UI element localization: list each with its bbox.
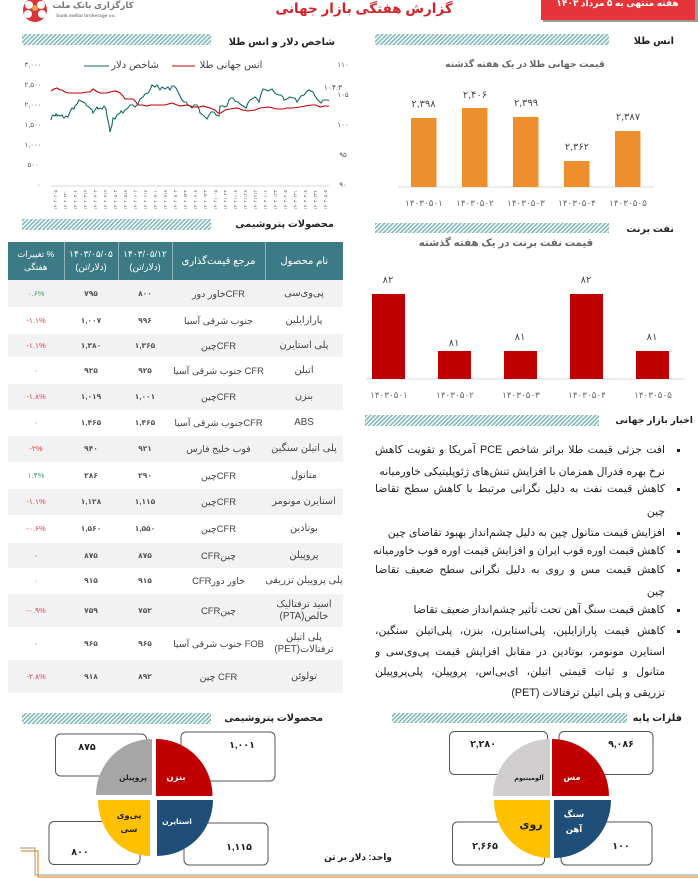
date labels: ۱۴۰۲۱۰۰۵ <box>213 189 218 210</box>
slice: iron ore: سنگ <box>564 809 584 819</box>
left axis: ۵۰۰ <box>27 162 39 169</box>
table: petrochemical products prices: CFRخاور دور <box>192 288 245 298</box>
table: petrochemical products prices: ۹۲۵ <box>138 366 152 374</box>
table: petrochemical products prices: ۲۹۰ <box>138 470 152 480</box>
slice: copper <box>552 739 609 796</box>
bar chart: gold price: ۱۴۰۳۰۵۰۳ <box>507 198 545 208</box>
news list: کاهش قیمت پارازایلین، پلی‌استایرن، بنزن، پلی‌اتیلن سنگین، <box>375 625 665 637</box>
date labels: ۱۴۰۲۰۴۰۳ <box>93 189 98 210</box>
slice: iron ore <box>554 800 611 858</box>
bar chart: brent price <box>366 236 685 400</box>
table: petrochemical products prices: ۹۶۵ <box>138 638 152 648</box>
value box: copper <box>559 732 653 774</box>
slice: aluminium <box>493 739 550 796</box>
bar chart: gold price: ۲,۳۸۷ <box>616 112 641 123</box>
date labels: ۱۴۰۳۰۵۰۵ <box>323 189 328 210</box>
slice: propylene: پروپیلن <box>119 773 147 782</box>
left axis: ۱,۰۰۰ <box>25 142 41 149</box>
heading: gold ounce <box>375 34 674 47</box>
bar chart: brent price: ۱۴۰۳۰۵۰۲ <box>436 390 474 400</box>
table: petrochemical products prices: تولوئن <box>291 670 317 682</box>
table: petrochemical products prices: FOB جنوب شرقی آسیا <box>173 638 264 648</box>
bar chart: gold price: ۲,۳۹۹ <box>514 98 538 109</box>
logo: bank mellat brokerage <box>23 0 135 22</box>
left axis: ۲,۵۰۰ <box>25 82 41 89</box>
table: petrochemical products prices: ۱,۱۱۵ <box>135 497 155 506</box>
table: petrochemical products prices: استایرن مونومر <box>272 496 336 507</box>
heading: petrochemicals prices <box>22 713 323 724</box>
heading: world market news: اخبار بازار جهانی <box>615 415 693 426</box>
table: petrochemical products prices: ۱۴۰۳/۰۵/۰۵ <box>69 249 113 259</box>
value box: propylene: ۸۷۵ <box>78 742 96 753</box>
table: petrochemical products prices: ۹۱۵ <box>138 576 152 585</box>
heading: base metals <box>392 713 682 724</box>
value box: aluminium <box>450 732 548 774</box>
bar chart: brent price: ۸۱ <box>647 332 657 343</box>
table: petrochemical products prices: CFRچین <box>201 340 236 350</box>
date labels: ۱۴۰۲۰۷۰۱ <box>153 190 158 210</box>
table: petrochemical products prices: -۲.۸% <box>26 672 46 680</box>
legend: انس جهانی طلا <box>200 60 262 71</box>
table: petrochemical products prices: اسید ترفتالیک <box>276 598 332 610</box>
left axis <box>25 62 41 189</box>
slice: zinc: روی <box>519 819 543 831</box>
table: petrochemical products prices: -۱.۸% <box>26 392 46 401</box>
table: petrochemical products prices: ۰.۶% <box>28 288 44 298</box>
news list: کاهش قیمت اوره فوب ایران و افزایش قیمت اوره فوب خاورمیانه <box>373 545 665 557</box>
bar chart: gold price: ۲,۳۹۸ <box>411 99 436 110</box>
heading: world market news <box>365 415 693 426</box>
table: petrochemical products prices: ۱.۴% <box>28 470 44 480</box>
table: petrochemical products prices: -۱.۱% <box>26 340 46 350</box>
table: petrochemical products prices: ۹۱۸ <box>84 672 98 680</box>
table: petrochemical products prices: پلی پروپیلن تزریقی <box>265 575 343 586</box>
table: petrochemical products prices: پلی استایرن <box>279 340 329 350</box>
news list: استایرن مونومر، بوتادین در مقابل افزایش قیمت پی‌وی‌سی و <box>375 646 665 658</box>
table: petrochemical products prices: پی‌وی‌سی <box>284 288 324 298</box>
table: petrochemical products prices <box>8 242 343 693</box>
bar chart: brent price: ۸۲ <box>581 275 591 286</box>
value box: propylene <box>56 734 146 776</box>
value box: benzene: ۱,۰۰۱ <box>229 740 255 751</box>
date labels: ۱۴۰۲۱۱۲۸ <box>243 189 248 210</box>
table: petrochemical products prices: ترفتالات(PET) <box>274 644 334 654</box>
slice: pvc: پی‌وی <box>117 810 141 821</box>
slice: pvc <box>98 800 150 856</box>
date labels: ۱۴۰۲۰۶۱۷ <box>143 189 148 210</box>
right axis: ۹۰ <box>339 182 347 189</box>
heading: petrochemical products: محصولات پتروشیمی <box>235 219 334 230</box>
heading: dollar index and gold ounce <box>22 34 335 48</box>
news list: متانول و ثبات قیمتی اتیلن، ای‌بی‌اس، پروپیلن، پلی‌پروپیلن <box>375 666 665 678</box>
bar chart: brent price: ۱۴۰۳۰۵۰۳ <box>502 390 540 400</box>
right axis: ۱۱۰ <box>337 62 349 69</box>
table: petrochemical products prices: ۱,۳۸۰ <box>81 340 101 350</box>
date labels: ۱۴۰۲۰۲۰۵ <box>53 189 58 210</box>
table: petrochemical products prices: CFRچین <box>201 523 236 534</box>
table: petrochemical products prices: مرجع قیمت‌گذاری <box>182 256 256 266</box>
slice: iron ore: آهن <box>566 823 583 835</box>
date labels: ۱۴۰۲۰۵۰۳ <box>113 189 118 210</box>
series: dollar index <box>51 85 329 132</box>
value callout: ۱۰۴.۳ <box>324 83 342 92</box>
table: petrochemical products prices: ۰ <box>34 638 38 648</box>
table: petrochemical products prices: ABS <box>294 417 314 428</box>
pie: base metals prices <box>450 732 653 865</box>
table: petrochemical products prices: -۰.۶% <box>26 524 46 533</box>
bar chart: gold price: ۱۴۰۳۰۵۰۲ <box>456 198 494 208</box>
table: petrochemical products prices: -۱.۱% <box>26 497 46 506</box>
table: petrochemical products prices: ۱,۰۱۹ <box>81 392 101 401</box>
table: petrochemical products prices: ۱,۵۶۰ <box>81 524 101 533</box>
slice: pvc: سی <box>121 824 137 834</box>
table: petrochemical products prices: CFRچین <box>201 391 236 402</box>
news list: کاهش قیمت سنگ آهن تحت تأثیر چشم‌انداز ضعیف تقاضا <box>413 604 665 616</box>
bar chart: brent price: ۱۴۰۳۰۵۰۴ <box>568 390 606 400</box>
table: petrochemical products prices: ۹۹۶ <box>138 316 152 324</box>
left axis: ۳,۰۰۰ <box>25 62 41 69</box>
table: petrochemical products prices: ۸۷۵ <box>138 550 152 560</box>
title: گزارش هفتگی بازار جهانی <box>275 0 453 16</box>
slice: propylene <box>96 739 152 795</box>
bar chart: gold price: ۲,۴۰۶ <box>463 90 487 101</box>
heading: petrochemicals prices: محصولات پتروشیمی <box>224 713 323 724</box>
table: petrochemical products prices: ۰ <box>34 550 38 560</box>
date labels: ۱۴۰۲۰۳۱۹ <box>83 189 88 210</box>
date labels: ۱۴۰۳۰۳۰۸ <box>303 189 308 210</box>
news list: چین <box>647 586 665 598</box>
heading: petrochemical products <box>22 219 334 230</box>
table: petrochemical products prices: جنوب شرقی آسیا <box>184 314 253 326</box>
news list: تزریقی و پلی اتیلن ترفتالات (PET) <box>511 687 665 699</box>
bar chart: gold price <box>398 58 654 208</box>
date labels: ۱۴۰۳۰۱۰۶ <box>263 189 268 210</box>
news list: چین <box>647 506 665 518</box>
news list <box>373 443 680 699</box>
date labels: ۱۴۰۲۰۸۲۳ <box>183 189 188 210</box>
bar chart: gold price: ۱۴۰۳۰۵۰۱ <box>405 198 443 208</box>
table: petrochemical products prices: -۰.۹% <box>26 606 46 614</box>
value box: pvc: ۸۰۰ <box>71 847 89 858</box>
date labels: ۱۴۰۳۰۲۲۱ <box>293 190 298 210</box>
right axis: ۱۰۵ <box>337 92 349 99</box>
table: petrochemical products prices: ۰ <box>34 366 38 374</box>
table: petrochemical products prices: متانول <box>291 470 317 480</box>
heading: gold ounce: انس طلا <box>634 36 674 47</box>
bar chart: gold price: ۱۴۰۳۰۵۰۵ <box>609 198 647 208</box>
table: petrochemical products prices: (دلار/تن) <box>129 262 161 272</box>
slice: styrene <box>157 800 213 856</box>
table: petrochemical products prices: پلی اتیلن <box>286 632 322 642</box>
table: petrochemical products prices: چینCFR <box>201 550 236 560</box>
value box: aluminium: ۲,۲۸۰ <box>470 739 496 750</box>
date badge <box>541 0 698 22</box>
date labels: ۱۴۰۳۰۳۲۴ <box>313 189 318 210</box>
value box: iron ore <box>561 822 652 865</box>
line chart: dollar index vs gold ounce <box>25 60 349 210</box>
table: petrochemical products prices: ۹۲۵ <box>84 366 98 374</box>
table: petrochemical products prices: ۱,۴۶۵ <box>135 418 155 427</box>
date labels: ۱۴۰۲۰۳۰۴ <box>73 189 78 210</box>
table: petrochemical products prices: چینCFR <box>201 604 236 616</box>
bar chart: brent price: ۱۴۰۳۰۵۰۱ <box>370 390 408 400</box>
bar chart: gold price: ۲,۳۶۲ <box>565 142 589 153</box>
bar chart: gold price: ۱۴۰۳۰۵۰۴ <box>558 198 596 208</box>
date labels: ۱۴۰۲۱۰۲۳ <box>223 189 228 210</box>
table: petrochemical products prices: ۷۵۲ <box>138 606 152 614</box>
news list: کاهش قیمت مس و روی به دلیل نگرانی سطح ضعیف تقاضا <box>375 564 665 576</box>
table: petrochemical products prices: ۲۸۶ <box>84 470 98 480</box>
news list: نرخ بهره فدرال همزمان با افزایش تنش‌های ژئوپلیتیکی خاورمیانه <box>379 466 665 478</box>
value box: styrene: ۱,۱۱۵ <box>226 842 252 853</box>
bar chart: brent price: ۱۴۰۳۰۵۰۵ <box>634 390 672 400</box>
table: petrochemical products prices: ۱,۳۶۵ <box>135 340 155 350</box>
slice: benzene <box>156 739 212 796</box>
left axis: ۲,۰۰۰ <box>25 102 41 109</box>
left axis: ۱,۵۰۰ <box>25 122 41 129</box>
date labels: ۱۴۰۲۰۵۱۸ <box>123 189 128 210</box>
heading: brent oil <box>375 223 674 235</box>
value box: zinc: ۲,۶۶۵ <box>472 841 498 852</box>
value box: iron ore: ۱۰۰ <box>612 841 630 852</box>
table: petrochemical products prices: ۷۵۹ <box>84 606 98 614</box>
date labels: ۱۴۰۲۱۱۰۸ <box>233 189 238 210</box>
table: petrochemical products prices: ۸۰۰ <box>138 288 152 298</box>
slice: aluminium: آلومینیوم <box>514 773 545 782</box>
slice: zinc <box>494 800 550 858</box>
table: petrochemical products prices: خالص(PTA) <box>280 610 328 622</box>
date labels: ۱۴۰۲۰۲۲۰ <box>63 190 68 210</box>
table: petrochemical products prices: هفتگی <box>24 262 47 272</box>
table: petrochemical products prices: ۸۹۲ <box>138 672 152 680</box>
date labels: ۱۴۰۲۰۴۱۹ <box>103 189 108 210</box>
table: petrochemical products prices: ۹۲۱ <box>138 444 152 453</box>
logo: bank mellat brokerage: bank mellat brokerage co. <box>56 13 116 19</box>
date labels <box>53 189 328 210</box>
legend: شاخص دلار <box>110 60 159 71</box>
unit note: واحد: دلار بر تن <box>324 852 392 863</box>
logo: bank mellat brokerage: کارگزاری بانک ملت <box>52 0 135 11</box>
table: petrochemical products prices: CFRچین <box>201 496 236 507</box>
heading: brent oil: نفت برنت <box>626 224 674 235</box>
slice: benzene: بنزن <box>166 772 186 783</box>
date labels: ۱۴۰۲۱۲۱۲ <box>253 189 258 210</box>
date labels: ۱۴۰۲۰۶۰۲ <box>133 189 138 210</box>
heading: dollar index and gold ounce: شاخص دلار و انس طلا <box>229 37 335 48</box>
news list: افت جزئی قیمت طلا براثر شاخص PCE آمریکا و تقویت کاهش <box>375 444 665 456</box>
slice: copper: مس <box>563 772 581 783</box>
table: petrochemical products prices: CFRجنوب شرقی آسیا <box>174 417 263 428</box>
value box: styrene <box>184 823 268 865</box>
table: petrochemical products prices: نام محصول <box>280 256 328 266</box>
bar chart: brent price: ۸۱ <box>449 338 459 349</box>
left axis: ۰ <box>37 182 41 189</box>
table: petrochemical products prices: CFR جنوب شرقی آسیا <box>173 364 264 376</box>
table: petrochemical products prices: ۹۶۵ <box>84 638 98 648</box>
value box: pvc <box>49 822 140 864</box>
right axis <box>337 62 349 189</box>
table: petrochemical products prices: -۲% <box>29 444 43 453</box>
table: petrochemical products prices: (دلار/تن) <box>75 262 107 272</box>
table: petrochemical products prices: ۱,۰۰۱ <box>135 392 155 401</box>
table: petrochemical products prices: ۷۹۵ <box>84 288 98 298</box>
bar chart: brent price: قیمت نفت برنت در یک هفته گذشته <box>419 236 593 249</box>
table: petrochemical products prices: % تغییرات <box>17 249 54 259</box>
pie: petrochemical prices <box>49 732 275 865</box>
table: petrochemical products prices: بنزن <box>295 391 313 402</box>
bar chart: brent price: ۸۲ <box>383 275 393 286</box>
right axis: ۱۰۰ <box>337 122 349 129</box>
table: petrochemical products prices: CFR چین <box>200 670 237 682</box>
date labels: ۱۴۰۳۰۱۲۳ <box>273 189 278 210</box>
table: petrochemical products prices: ۱,۱۲۸ <box>81 497 101 506</box>
table: petrochemical products prices: ۹۱۵ <box>84 576 98 585</box>
table: petrochemical products prices: ۱,۰۰۷ <box>81 316 101 324</box>
table: petrochemical products prices: ۰ <box>34 576 38 585</box>
news list: کاهش قیمت نفت به دلیل نگرانی مرتبط با کاهش سطح تقاضا <box>375 483 665 495</box>
table: petrochemical products prices: ۱,۵۵۰ <box>135 524 155 533</box>
slice: styrene: استایرن <box>162 817 192 826</box>
table: petrochemical products prices: ۹۴۰ <box>84 444 98 453</box>
table: petrochemical products prices: پلی اتیلن سنگین <box>271 443 337 454</box>
table: petrochemical products prices: ۱,۴۶۵ <box>81 418 101 427</box>
table: petrochemical products prices: پارازایلین <box>285 314 322 326</box>
news list: افزایش قیمت متانول چین به دلیل چشم‌انداز بهبود تقاضای چین <box>388 527 665 539</box>
right axis: ۹۵ <box>339 152 347 159</box>
table: petrochemical products prices: ۱۴۰۳/۰۵/۱۲ <box>123 249 167 259</box>
table: petrochemical products prices: خاور دورCFR <box>192 575 245 586</box>
date labels: ۱۴۰۳۰۲۰۵ <box>283 189 288 210</box>
table: petrochemical products prices: فوب خلیج فارس <box>186 443 251 454</box>
value box: benzene <box>181 732 275 781</box>
date labels: ۱۴۰۲۰۹۲۳ <box>203 189 208 210</box>
bar chart: gold price: قیمت جهانی طلا در یک هفته گذشته <box>445 58 605 70</box>
table: petrochemical products prices: اتیلن <box>294 364 314 376</box>
heading: base metals: فلزات پایه <box>633 713 682 724</box>
date labels: ۱۴۰۲۰۷۱۸ <box>163 189 168 210</box>
series: gold ounce <box>51 88 329 113</box>
date labels: ۱۴۰۲۰۹۰۸ <box>193 189 198 210</box>
table: petrochemical products prices: ۰ <box>34 418 38 427</box>
date labels: ۱۴۰۲۰۸۰۳ <box>173 189 178 210</box>
table: petrochemical products prices: CFRچین <box>201 470 236 480</box>
footer frame lines <box>20 848 698 877</box>
table: petrochemical products prices: -۱.۱% <box>26 316 46 324</box>
value box: copper: ۹,۰۸۶ <box>608 739 634 750</box>
value box: zinc <box>452 822 544 865</box>
table: petrochemical products prices: ۸۷۵ <box>84 550 98 560</box>
bar chart: brent price: ۸۱ <box>515 332 525 343</box>
legend <box>84 60 262 71</box>
table: petrochemical products prices: بوتادین <box>290 523 318 534</box>
table: petrochemical products prices: پروپیلن <box>289 550 319 560</box>
